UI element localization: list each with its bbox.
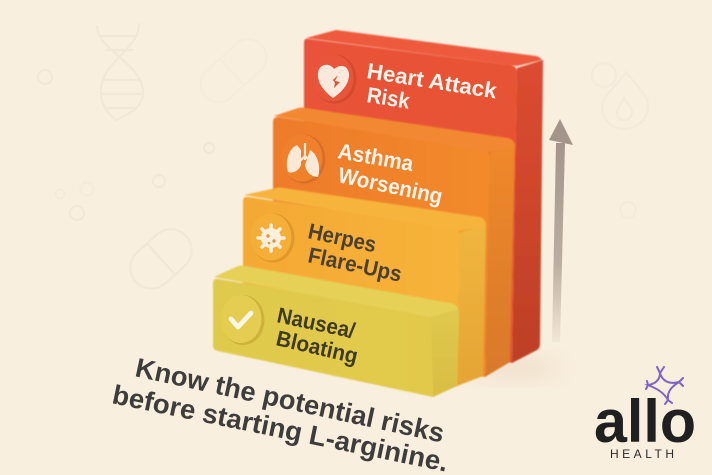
- label: asthma worsening: [336, 138, 445, 209]
- label: nausea bloating: Nausea/: [275, 302, 357, 343]
- label: heart attack risk: Heart Attack: [365, 58, 499, 104]
- label: asthma worsening: Worsening: [336, 162, 445, 209]
- icon: virus: [250, 214, 294, 262]
- panel: herpes flare-ups block: [243, 188, 486, 386]
- arrow: rising risk: [549, 119, 573, 342]
- icon: faint capsule top: [193, 32, 274, 109]
- icon: purple star: [646, 367, 683, 404]
- soft shadow below blocks: [470, 356, 560, 380]
- background medical icons: [38, 24, 648, 297]
- panel: nausea bloating block: [213, 266, 459, 397]
- icon: lungs: [282, 134, 326, 184]
- label: nausea bloating: Bloating: [274, 326, 360, 369]
- caption: know the potential risks: Know the potential risks: [133, 353, 447, 448]
- label: herpes flare-ups: Flare-Ups: [306, 242, 404, 287]
- icon: heart: [312, 54, 356, 104]
- logo: allo health: [594, 367, 696, 461]
- label: herpes flare-ups: [306, 218, 404, 287]
- icon: capsule: [122, 221, 200, 297]
- icon: DNA helix: [97, 24, 143, 120]
- logo subtitle: HEALTH: [610, 447, 674, 461]
- panel: asthma worsening block: [273, 108, 515, 377]
- label: nausea bloating: [274, 302, 360, 369]
- label: heart attack risk: Risk: [365, 82, 412, 114]
- icon: blood drop: [592, 63, 648, 129]
- caption: know the potential risks: before starting L-arginine.: [110, 379, 451, 475]
- icon: small circles: [38, 70, 636, 220]
- logo wordmark: allo: [594, 388, 696, 455]
- icon: check mark: [220, 295, 264, 345]
- label: herpes flare-ups: Herpes: [306, 218, 379, 257]
- label: asthma worsening: Asthma: [336, 138, 416, 176]
- panel: heart attack risk block: [304, 30, 543, 363]
